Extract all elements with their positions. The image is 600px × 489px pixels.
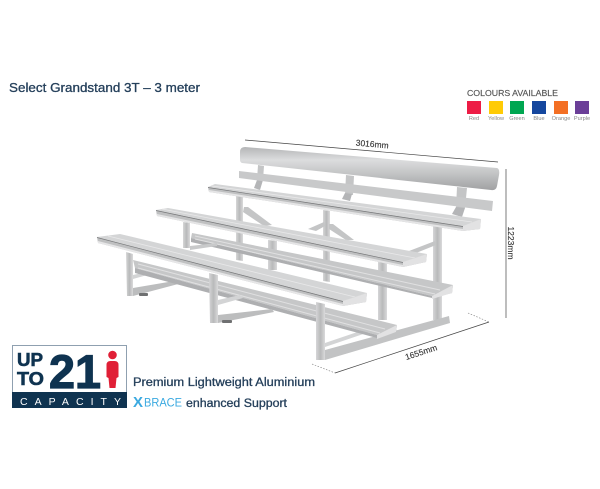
capacity label: CAPACITY [20,396,121,408]
feature: xbrace support: enhanced Support [186,398,288,410]
capacity badge [12,345,127,408]
dimension: depth 1655mm: 1655mm [404,342,438,362]
swatch labels: Purple [574,116,590,122]
backrest supports [254,165,467,217]
dimension: height 1223mm: 1223mm [506,226,516,260]
dimension: depth 1655mm [312,313,489,373]
feet [139,293,232,323]
centre mid post [268,240,277,270]
rear post lower right frame [378,262,387,320]
capacity band [12,392,127,408]
grandstand product image [97,147,499,360]
number 21: 21 [49,345,101,398]
front bench [97,234,367,306]
centre front frame [209,273,274,323]
icon: person [106,351,118,388]
swatch labels: Green [509,116,525,122]
upper backrest panel [240,147,499,190]
swatch labels [469,116,590,122]
front-right frame rail [325,316,450,360]
middle bench [156,208,427,267]
front footboard [133,260,397,339]
swatch labels: Blue [533,116,545,122]
feature: xbrace support [133,394,288,411]
lower backrest slat [239,171,493,211]
feature: premium aluminium: Premium Lightweight Aluminium [133,377,315,389]
capacity badge: TO [17,369,44,389]
feature: xbrace support: X [133,394,143,411]
up to text: UP [17,350,43,370]
swatch: purple [575,101,589,114]
dimension: width 3016mm: 3016mm [355,138,389,150]
feature: xbrace support: BRACE [144,398,182,410]
swatch labels: Orange [552,116,570,122]
top bench [208,184,481,231]
swatch: orange [554,101,568,114]
colours legend [467,88,590,122]
legend heading: COLOURS AVAILABLE [467,88,558,98]
rear posts and braces [236,194,442,320]
middle footboard [191,233,453,299]
title: Select Grandstand 3T – 3 meter [9,81,200,95]
swatch: green [510,101,524,114]
swatch: blue [532,101,546,114]
swatch labels: Red [469,116,479,122]
swatch: red [467,101,481,114]
dimension: width 3016mm [245,138,498,162]
swatch: yellow [489,101,503,114]
swatch labels: Yellow [488,116,505,122]
right front post [316,302,325,360]
left frame [126,222,217,296]
